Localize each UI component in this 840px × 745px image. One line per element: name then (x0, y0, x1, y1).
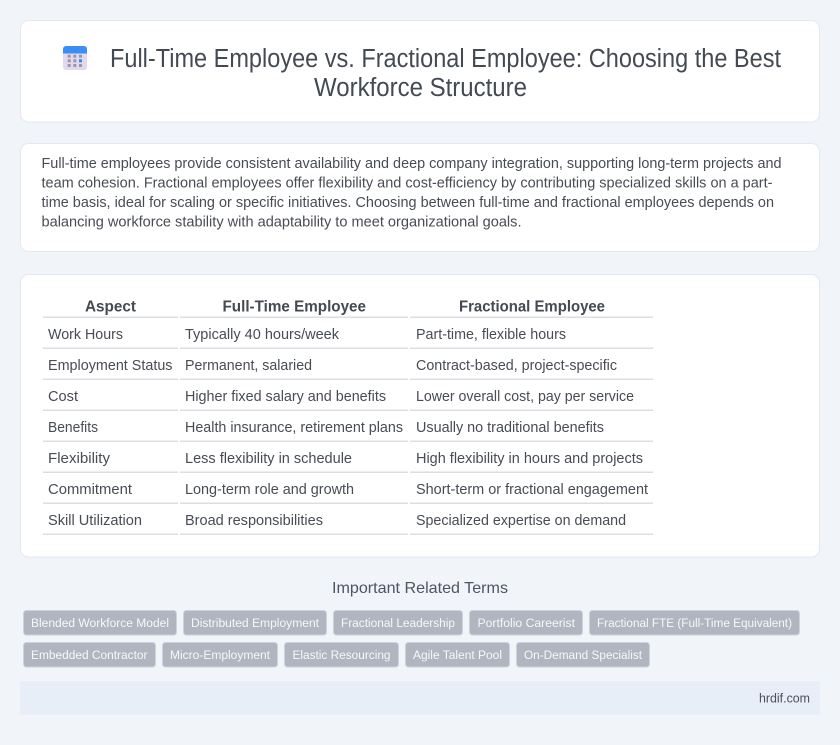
tag (516, 642, 650, 667)
table header: Aspect (85, 298, 136, 316)
tag (590, 610, 800, 635)
row: skill utilization (48, 513, 626, 529)
panel: summary text: balancing workforce stability with adaptability to meet organizational goals. (42, 214, 522, 230)
row: commitment: Long-term role and growth (185, 482, 354, 498)
row: employment status: Contract-based, project-specific (416, 358, 617, 374)
tag: Elastic Resourcing (292, 648, 391, 662)
row: commitment: Short-term or fractional engagement (416, 482, 648, 498)
row: cost (48, 389, 634, 405)
footer: hrdif.com (759, 690, 810, 706)
tag (184, 610, 326, 635)
tag: Micro-Employment (170, 648, 271, 662)
panel: header (20, 20, 820, 122)
tag (24, 610, 176, 635)
row: commitment (48, 482, 648, 498)
heading: important related terms: Important Related Terms (332, 580, 508, 597)
row: benefits: Benefits (48, 420, 98, 436)
tag (406, 642, 510, 667)
row: employment status (48, 358, 617, 374)
row: work hours (48, 327, 566, 343)
tag: Blended Workforce Model (31, 616, 169, 630)
row: work hours: Work Hours (48, 327, 123, 343)
row: employment status: Permanent, salaried (185, 358, 312, 374)
tag: Portfolio Careerist (478, 616, 576, 630)
icon: calendar (63, 46, 87, 70)
title: Workforce Structure (314, 74, 527, 102)
tag (334, 610, 462, 635)
row: flexibility (48, 451, 643, 467)
tag: Fractional Leadership (341, 616, 455, 630)
row: flexibility: High flexibility in hours and projects (416, 451, 643, 467)
row: cost: Higher fixed salary and benefits (185, 389, 386, 405)
row: employment status: Employment Status (48, 358, 172, 374)
row: flexibility: Less flexibility in schedule (185, 451, 352, 467)
row: cost: Lower overall cost, pay per service (416, 389, 634, 405)
tag: Fractional FTE (Full-Time Equivalent) (597, 616, 792, 630)
row: work hours: Part-time, flexible hours (416, 327, 566, 343)
tag (470, 610, 582, 635)
row: work hours: Typically 40 hours/week (185, 327, 340, 343)
title: Full-Time Employee vs. Fractional Employee: Choosing the Best (110, 45, 781, 73)
tags: related terms (24, 610, 800, 667)
row: commitment: Commitment (48, 482, 132, 498)
tag: Embedded Contractor (31, 648, 148, 662)
tag (24, 642, 156, 667)
row: skill utilization: Broad responsibilities (185, 513, 323, 529)
tag (162, 642, 278, 667)
panel: summary text: time basis, ideal for scaling or specific initiatives. Choosing between full-time and fractional employees depends on (42, 195, 774, 211)
row: skill utilization: Specialized expertise on demand (416, 513, 626, 529)
title (110, 45, 781, 102)
tag: On-Demand Specialist (524, 648, 643, 662)
tag: Distributed Employment (191, 616, 320, 630)
tag (284, 642, 398, 667)
row: benefits: Health insurance, retirement plans (185, 420, 403, 436)
tag: Agile Talent Pool (413, 648, 502, 662)
table header: Fractional Employee (459, 298, 605, 316)
row: benefits: Usually no traditional benefits (416, 420, 604, 436)
table header: Full-Time Employee (222, 298, 366, 316)
row: skill utilization: Skill Utilization (48, 513, 142, 529)
panel: summary text (20, 144, 820, 252)
row: benefits (48, 420, 604, 436)
table header (85, 298, 605, 316)
panel: summary text: Full-time employees provide consistent availability and deep company integration, supporting long-term projects and (42, 156, 782, 172)
panel: comparison table (20, 274, 820, 557)
row: flexibility: Flexibility (48, 451, 111, 467)
row: cost: Cost (48, 389, 78, 405)
panel: summary text: team cohesion. Fractional employees offer flexibility and cost-efficiency by contributing specialized skills on a part- (42, 176, 773, 192)
footer (20, 681, 820, 714)
